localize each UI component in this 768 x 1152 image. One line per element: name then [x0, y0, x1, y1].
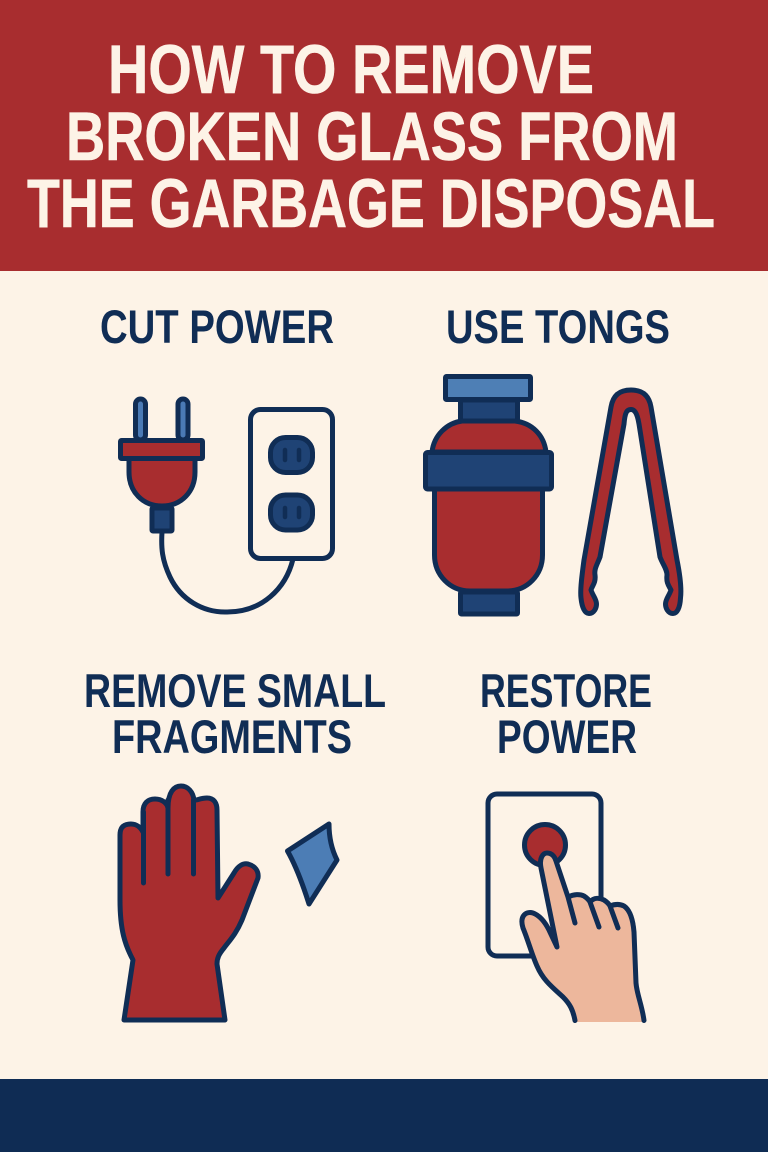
heading: remove small fragments [84, 664, 386, 763]
title [27, 31, 715, 242]
heading: restore power [480, 664, 652, 763]
icon: tongs [581, 390, 681, 614]
footer band [0, 1079, 768, 1152]
heading: remove small fragments: REMOVE SMALL [84, 664, 386, 717]
heading: restore power: POWER [497, 710, 637, 763]
icon: glass shard [288, 824, 337, 904]
icon: wall button and finger [488, 794, 644, 1022]
icon: plug and outlet [120, 399, 332, 612]
icon: glove [120, 786, 258, 1020]
heading: cut power: CUT POWER [100, 300, 334, 353]
title: HOW TO REMOVE [108, 31, 594, 108]
icon: disposal [426, 376, 552, 614]
header band [0, 0, 768, 271]
heading: use tongs: USE TONGS [446, 300, 670, 353]
heading: remove small fragments: FRAGMENTS [112, 710, 352, 763]
heading: restore power: RESTORE [480, 664, 652, 717]
